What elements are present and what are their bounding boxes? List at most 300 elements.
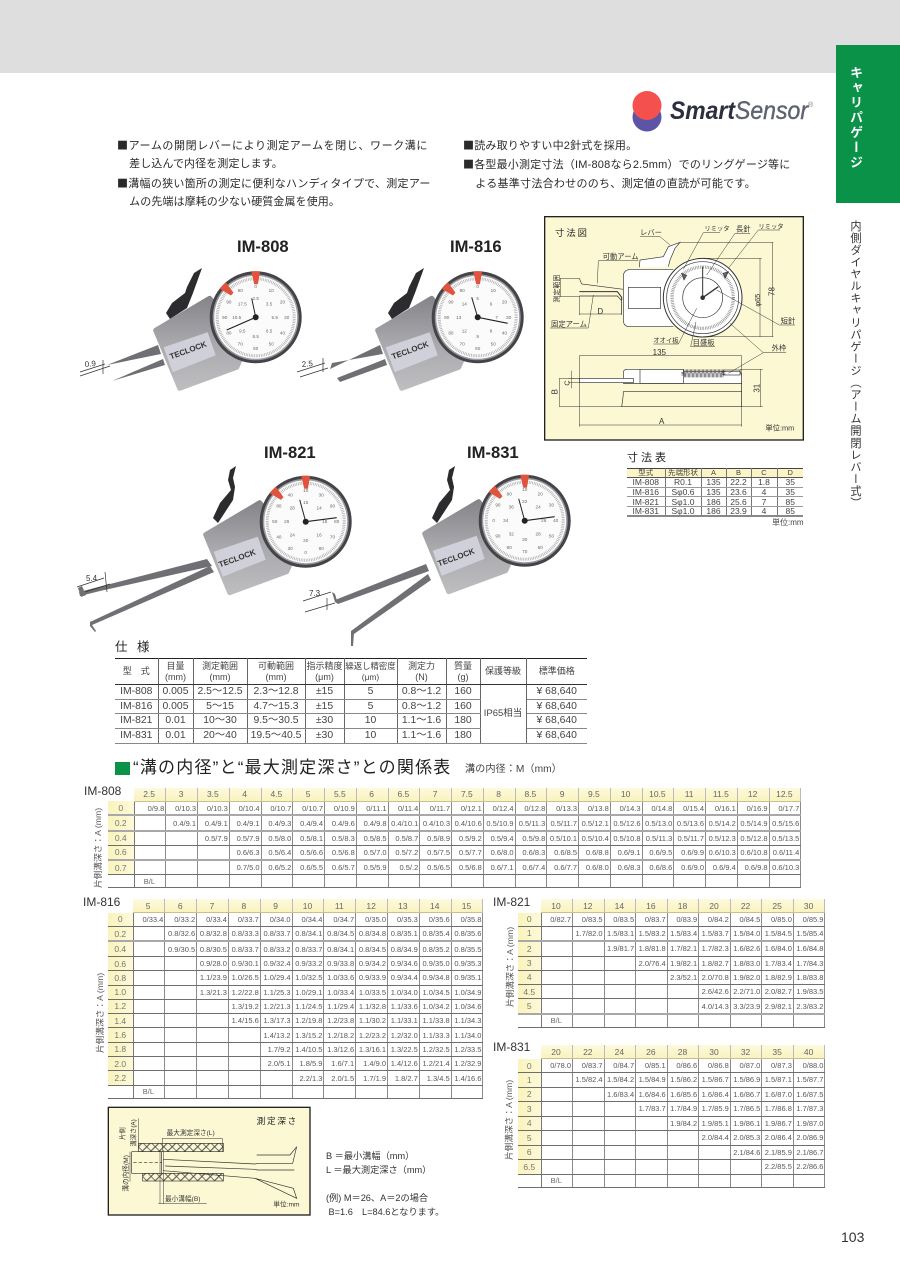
- drawing labels: 寸法図: [555, 227, 589, 238]
- table: IM-821: 2.0/70.8: [702, 973, 729, 982]
- table: IM-821: 0/84.5: [739, 915, 760, 924]
- table: IM-816: 1.7/9.2: [268, 1045, 291, 1054]
- dial: 60: [538, 545, 543, 550]
- table: IM-816: 1.3/4.5: [427, 1074, 450, 1083]
- depth notes: L ＝最大測定深さ（mm）: [326, 1165, 431, 1175]
- table: IM-816: 0.8/35.1: [391, 929, 418, 938]
- table: IM-808: 0.6/8.8: [586, 848, 609, 857]
- dial: 90: [495, 534, 501, 539]
- table: IM-816: 1.0/34.5: [423, 988, 450, 997]
- table: IM-821: 0/83.9: [676, 915, 697, 924]
- table: IM-821: 3.3/23.9: [733, 1002, 760, 1011]
- side view: [623, 369, 742, 383]
- table: IM-808: 0.5/11.3: [646, 834, 672, 843]
- features text left: ムの先端は摩耗の少ない硬質金属を使用。: [129, 196, 340, 208]
- dial: 20: [502, 299, 507, 304]
- specification table: 180: [454, 730, 472, 741]
- dial: 30: [284, 315, 290, 320]
- table: IM-816: 1.6: [114, 1030, 126, 1040]
- table: IM-808: 0.5/.2: [399, 863, 418, 872]
- heading text: “溝の内径”と“最大測定深さ”との関係表: [133, 758, 451, 777]
- specification table: (mm): [165, 672, 186, 682]
- table: IM-808: 0.4/10.3: [423, 819, 450, 828]
- logo: SmartSensor: Smart: [670, 97, 737, 125]
- table: IM-831: 1.9/86.7: [765, 1119, 792, 1128]
- table: IM-816: 0.9/35.3: [454, 959, 481, 968]
- table: IM-821: 1.5/84.5: [765, 929, 792, 938]
- table: IM-808: 7: [433, 789, 437, 799]
- table: IM-816: 5: [146, 901, 151, 911]
- table: IM-808: 0.6/9.8: [745, 863, 768, 872]
- table: IM-816: 0.9/30.5: [168, 945, 195, 954]
- dial: 9: [476, 334, 479, 339]
- table: IM-808: 0/15.4: [683, 804, 704, 813]
- table: IM-821: 0/82.7: [550, 915, 571, 924]
- specification table: 質量: [454, 660, 472, 670]
- table: IM-831: 0/87.3: [771, 1061, 792, 1070]
- table: IM-821: 1.7/82.3: [702, 944, 729, 953]
- table: IM-821: 18: [678, 901, 687, 911]
- drawing labels: リミッタ: [704, 224, 730, 233]
- table: IM-816: 1.8/5.9: [299, 1059, 322, 1068]
- features text left: 差し込んで内径を測定します。: [129, 158, 283, 170]
- table: IM-821: 12: [583, 901, 593, 911]
- specification table: 測定力: [408, 660, 435, 670]
- table: IM-816: 0.6: [114, 958, 126, 968]
- table: IM-808: 0.5/8.1: [300, 834, 323, 843]
- table: IM-821: 1.8/83.8: [796, 973, 823, 982]
- table: IM-831: 1.6/87.5: [796, 1090, 823, 1099]
- table: IM-816: 1.2/32.0: [391, 1031, 418, 1040]
- table: IM-821: 2.9/82.1: [765, 1002, 792, 1011]
- heading unit: 溝の内径：M（mm）: [465, 764, 562, 775]
- table: IM-808: 0.5/11.3: [519, 819, 545, 828]
- table: IM-821: 1.6/84.0: [765, 944, 792, 953]
- dial: 8: [490, 328, 493, 333]
- table: IM-821: 1.9/82.0: [733, 973, 760, 982]
- table: IM-831: 1.9/86.1: [733, 1119, 760, 1128]
- table: IM-831: 1.5/87.1: [765, 1075, 792, 1084]
- table: IM-808: 5: [306, 789, 310, 799]
- table: IM-816: [108, 899, 483, 1099]
- table: IM-831: 0: [527, 1061, 532, 1071]
- title: IM-808: IM-808: [237, 237, 289, 256]
- table: IM-808: 0.6/5.5: [300, 863, 323, 872]
- table: IM-808: 0/10.7: [302, 804, 323, 813]
- vertical label: IM-821: 片側溝深さ：A (mm): [505, 927, 515, 1007]
- table: IM-808: 0.6/9.9: [681, 848, 704, 857]
- dial: 5: [476, 296, 479, 301]
- drawing labels: 短針: [781, 316, 796, 325]
- table: IM-816: 1.0/26.5: [232, 973, 259, 982]
- table: IM-831: 0/86.8: [708, 1061, 729, 1070]
- table: IM-816: 1.4/12.6: [391, 1059, 418, 1068]
- specification table: IP65相当: [484, 708, 522, 719]
- table: IM-816: 0.9/30.1: [232, 959, 259, 968]
- table: IM-816: 1.3/17.3: [263, 1016, 291, 1025]
- table: IM-808: 0.5/10.8: [613, 834, 640, 843]
- dial: 50: [491, 342, 496, 347]
- table: IM-831: 2.2/86.6: [796, 1162, 823, 1171]
- arms: [332, 564, 431, 646]
- page number: 103: [841, 1229, 864, 1245]
- table: IM-816: 0/33.7: [238, 915, 259, 924]
- depth notes: [326, 1151, 444, 1217]
- table: IM-808: 0.4/9.8: [364, 819, 386, 828]
- table: IM-816: 1.3/22.5: [391, 1045, 418, 1054]
- table: IM-816: 1.2/32.9: [454, 1059, 481, 1068]
- drawing labels: レバー: [640, 228, 662, 237]
- dial: 0: [492, 518, 495, 523]
- table: IM-816: 1.0/34.2: [423, 1002, 450, 1011]
- table: IM-816: 0.9/34.4: [391, 973, 418, 982]
- dial: 26: [284, 519, 290, 524]
- dial: 90: [330, 504, 335, 509]
- dimension 0.9: 0.9: [84, 359, 97, 369]
- table: IM-821: 1.5/84.0: [733, 929, 760, 938]
- panel: measuring depth diagram: 溝深さ(A): [128, 1119, 137, 1147]
- table: IM-808: 0.5/12.1: [582, 819, 609, 828]
- table: IM-831: 2.0/86.4: [765, 1133, 792, 1142]
- table: IM-816: 1.0/33.5: [359, 988, 386, 997]
- specification table: 繰返し精密度: [345, 660, 396, 670]
- label: IM-831 table: IM-831: [493, 1040, 530, 1054]
- table: IM-808: 0.5/13.0: [645, 819, 672, 828]
- table: IM-816: 1.1/29.4: [327, 1002, 354, 1011]
- dial: 80: [319, 546, 324, 551]
- table: IM-808: 0.6/8.0: [586, 863, 609, 872]
- table: IM-831: 35: [772, 1047, 782, 1057]
- dial: 10: [522, 487, 528, 492]
- table: IM-816: 1.2/32.5: [423, 1045, 450, 1054]
- table: IM-808: 0/13.3: [556, 804, 577, 813]
- table: IM-808: 0.6/8.3: [522, 848, 545, 857]
- table: IM-816: 0.8/33.3: [232, 929, 259, 938]
- table: IM-821: 1.7/82.0: [575, 929, 603, 938]
- table: IM-808: 10.5: [649, 789, 666, 799]
- body: [378, 298, 468, 388]
- dial: 28: [536, 532, 541, 537]
- table: IM-808: 0/9.8: [148, 804, 164, 813]
- table: IM-821: 2.6/42.6: [702, 987, 729, 996]
- drawing labels: [550, 221, 796, 433]
- specification table: 0.005: [162, 686, 188, 697]
- specification table: 0.8～1.2: [402, 701, 441, 712]
- table: IM-816: 1.0/33.4: [327, 988, 354, 997]
- table: IM-808: 0.5/9.4: [491, 834, 514, 843]
- table: IM-831: 1.6/87.0: [765, 1090, 792, 1099]
- drawing labels: A: [659, 417, 665, 426]
- dimension 7.3: [303, 589, 335, 612]
- specification table: ±15: [316, 686, 333, 697]
- table: IM-816: 1.0/29.4: [263, 973, 291, 982]
- lever: [166, 268, 202, 319]
- table: IM-831: 2.0/85.3: [733, 1133, 760, 1142]
- table: IM-808: 0.5/14.2: [709, 819, 736, 828]
- table: IM-808: 0.5/9.8: [522, 834, 545, 843]
- table: IM-816: 0.8/34.9: [391, 945, 418, 954]
- table: IM-816: 2.0/1.5: [331, 1074, 354, 1083]
- table: IM-831: 2: [527, 1089, 532, 1099]
- specification table: (mm): [210, 672, 230, 682]
- dimension 5.4: [77, 572, 110, 592]
- table: IM-816: 1.3/12.6: [327, 1045, 354, 1054]
- table: IM-816: 0.9/34.8: [423, 973, 450, 982]
- dial: 3.5: [266, 301, 273, 306]
- specification table: 4.7～15.3: [253, 701, 299, 712]
- table: IM-821: [518, 899, 825, 1028]
- table: IM-808: 0/10.4: [239, 804, 260, 813]
- specification table: 5～15: [206, 701, 234, 712]
- table: IM-821: 1.5/83.7: [702, 929, 729, 938]
- table: IM-816: 0.9/33.9: [359, 973, 386, 982]
- specification table: ±30: [316, 715, 333, 726]
- lever: [388, 268, 424, 319]
- drawing labels: 135: [653, 348, 667, 357]
- table: IM-808: 0.7: [115, 863, 127, 873]
- table: IM-821: 30: [804, 901, 813, 911]
- table: IM-808: 0.5/7.0: [364, 848, 386, 857]
- table: IM-816: 0.8/32.8: [200, 929, 227, 938]
- table: IM-831: 0/87.0: [739, 1061, 760, 1070]
- table: IM-808: 0.6/10.3: [772, 863, 799, 872]
- table: IM-816: 1.2/22.8: [232, 988, 259, 997]
- table: IM-831: [518, 1045, 825, 1188]
- dial: 0: [476, 284, 479, 289]
- table: IM-808: B/L: [144, 877, 155, 886]
- table: IM-831: 1.5/87.7: [796, 1075, 823, 1084]
- table: IM-831: 2.1/86.7: [796, 1148, 823, 1157]
- table: IM-816: 2.2/1.3: [299, 1074, 322, 1083]
- table: IM-808: 0.6/9.1: [618, 848, 640, 857]
- dial: 14: [462, 301, 467, 306]
- table: IM-808: 0.5/6.8: [332, 848, 355, 857]
- dial: 30: [288, 546, 293, 551]
- table: IM-816: 1.0/34.6: [454, 1002, 481, 1011]
- specification table: 可動範囲: [258, 660, 294, 670]
- panel: measuring depth diagram: 単位:mm: [273, 1200, 300, 1209]
- table: IM-831: 6.5: [523, 1162, 535, 1172]
- table: IM-831: 40: [804, 1047, 813, 1057]
- table: IM-816: 1.2/33.5: [454, 1045, 481, 1054]
- table: IM-831: 1.9/84.2: [670, 1119, 697, 1128]
- dial: 60: [475, 346, 481, 351]
- table: IM-808: 0.4/10.6: [455, 819, 482, 828]
- specification table: 9.5～30.5: [253, 715, 299, 726]
- specification table: 19.5～40.5: [251, 730, 301, 741]
- dial: 90: [495, 503, 501, 508]
- table: IM-821: 0/85.9: [803, 915, 823, 924]
- table: IM-808: 8: [496, 789, 501, 799]
- table: IM-816: 2.2: [114, 1073, 126, 1083]
- table: IM-831: 20: [551, 1047, 561, 1057]
- dial: 90: [226, 299, 232, 304]
- table: IM-808: 0.5/13.5: [772, 834, 799, 843]
- table: IM-816: 0.4: [114, 944, 126, 954]
- dial: 26: [541, 518, 547, 523]
- table: IM-831: 1.7/85.9: [702, 1104, 729, 1113]
- dial: 30: [319, 492, 324, 497]
- table: IM-808: 0.5/9.2: [459, 834, 482, 843]
- table: IM-808: 0/10.9: [334, 804, 355, 813]
- table: IM-808: 0.6/8.5: [554, 848, 577, 857]
- dial: 40: [288, 492, 293, 497]
- table: IM-816: 1.4/15.6: [232, 1016, 259, 1025]
- dial: 70: [330, 535, 335, 540]
- table: IM-808: 0.6/8.3: [618, 863, 640, 872]
- table: IM-816: 1.4/13.2: [263, 1031, 291, 1040]
- table: IM-808: 0/17.7: [778, 804, 799, 813]
- table: IM-821: 1.8/81.8: [639, 944, 666, 953]
- features text right: ■各型最小測定寸法（IM-808なら2.5mm）でのリングゲージ等に: [463, 156, 790, 172]
- specification table: (mm): [266, 672, 286, 682]
- dial: 24: [290, 533, 295, 538]
- table: IM-808: 0.5/13.6: [677, 819, 704, 828]
- panel: measuring depth diagram: [108, 1106, 311, 1216]
- table: IM-816: 1.3/15.2: [295, 1031, 322, 1040]
- table: IM-816: 1.2/21.4: [423, 1059, 450, 1068]
- dial: 24: [536, 505, 541, 510]
- table: IM-821: 1.9/82.1: [670, 959, 697, 968]
- table: IM-816: 1.1/33.8: [423, 1016, 450, 1025]
- table: IM-831: 2.1/85.9: [765, 1148, 792, 1157]
- table: IM-808: 3: [179, 789, 183, 799]
- table: IM-816: 0.8/34.1: [295, 929, 322, 938]
- table: IM-816: 1.1/33.3: [423, 1031, 450, 1040]
- vertical label: IM-816: 片側溝深さ：A (mm): [95, 973, 105, 1053]
- table: IM-816: 0: [118, 914, 123, 924]
- table: IM-816: 1.4/9.0: [363, 1059, 386, 1068]
- table: IM-816: 0.9/35.0: [423, 959, 450, 968]
- specification table: ¥ 68,640: [537, 701, 577, 712]
- depth notes: B ＝最小溝幅（mm）: [326, 1151, 414, 1161]
- gauge: IM-821: [77, 466, 352, 632]
- table: IM-816: 2.0/5.1: [268, 1059, 291, 1068]
- table: IM-808: 0.4: [115, 833, 127, 843]
- drawing labels: B: [550, 389, 559, 394]
- table: IM-808: 0.5/8.5: [364, 834, 386, 843]
- table: IM-808: 0.4/9.3: [268, 819, 291, 828]
- dial: 8.5: [253, 334, 259, 339]
- table: IM-821: 0/83.5: [613, 915, 634, 924]
- features text right: ■読み取りやすい中2針式を採用。: [463, 137, 637, 153]
- dial: 6: [490, 301, 493, 306]
- table: IM-831: 0/86.6: [676, 1061, 697, 1070]
- table: IM-808: 0.5/6.6: [300, 848, 323, 857]
- table: IM-816: 0.2: [114, 929, 126, 939]
- table: IM-816: 1.1/24.5: [295, 1002, 322, 1011]
- table: IM-808: 0.4/9.1: [173, 819, 196, 828]
- dial: 90: [238, 288, 243, 293]
- specification table: 型 式: [123, 666, 150, 676]
- table: IM-808: 0.6/10.8: [740, 848, 768, 857]
- table: IM-808: 0/10.3: [175, 804, 196, 813]
- leader lines: [550, 230, 795, 427]
- table: IM-831: 28: [678, 1047, 687, 1057]
- brand: TECLOCK: [217, 548, 257, 569]
- dial: 20: [538, 491, 543, 496]
- table: IM-808: 0.6/9.0: [681, 863, 704, 872]
- gauge outline, front: [639, 242, 680, 267]
- table: IM-816: 15: [462, 901, 471, 911]
- table: IM-816: 0.8/34.5: [327, 929, 354, 938]
- table: IM-808: 0.5/6.5: [427, 863, 450, 872]
- dial: 32: [509, 532, 514, 537]
- specification table: ±15: [316, 701, 333, 712]
- heading: specifications: 仕 様: [115, 640, 152, 654]
- table: IM-808: 5.5: [334, 789, 346, 799]
- specification table: IM-821: [120, 715, 152, 726]
- table: IM-816: 0/34.0: [270, 915, 291, 924]
- tab title: キャリパゲージ: [848, 66, 863, 170]
- dial: 18: [322, 519, 328, 524]
- table: IM-808: 0.5/8.9: [427, 834, 450, 843]
- table: IM-808: 0.5/12.3: [709, 834, 736, 843]
- table: IM-831: 5: [527, 1133, 532, 1143]
- table: IM-808: 0.6/8.0: [491, 848, 514, 857]
- table: IM-808: 0.5/7.7: [459, 848, 482, 857]
- table: IM-808: 0.6/5.7: [332, 863, 355, 872]
- gauge: IM-831: [303, 466, 571, 646]
- table: IM-808: 0.6/10.3: [709, 848, 736, 857]
- table: IM-816: 7: [210, 901, 214, 911]
- panel: measuring depth diagram: 片側: [118, 1127, 127, 1140]
- table: IM-808: 12: [748, 789, 757, 799]
- table: IM-831: 1.9/85.1: [702, 1119, 729, 1128]
- dial: 80: [276, 504, 282, 509]
- specification table: 0.01: [165, 730, 186, 741]
- table: IM-816: 1.1/32.8: [359, 1002, 386, 1011]
- table: IM-808: 0.5/12.8: [740, 834, 768, 843]
- specification table: 標準価格: [539, 666, 575, 676]
- table: IM-816: 0.8/33.2: [263, 945, 291, 954]
- drawing labels: 測定範囲: [552, 275, 561, 303]
- table: IM-808: 0.6/5.2: [268, 863, 291, 872]
- table: IM-808: 0/11.7: [430, 804, 450, 813]
- table: IM-816: 0/33.4: [142, 915, 163, 924]
- lever: [213, 466, 236, 523]
- specification table: IM-808: [120, 686, 152, 697]
- table: IM-831: 1.5/84.2: [607, 1075, 634, 1084]
- dial: 20: [303, 538, 309, 543]
- arms: [107, 345, 165, 381]
- table: IM-808: 0/14.3: [620, 804, 640, 813]
- table: IM-831: 1: [527, 1075, 532, 1085]
- table: IM-816: 0.8/33.7: [263, 929, 291, 938]
- table: IM-816: 0/35.0: [365, 915, 386, 924]
- features text right: よる基準寸法合わせののち、測定値の直読が可能です。: [475, 178, 756, 190]
- table: IM-821: 14: [615, 901, 624, 911]
- table: IM-831: 0/88.0: [803, 1061, 823, 1070]
- dial: 7: [495, 315, 498, 320]
- table: IM-816: 1.8/2.7: [395, 1074, 418, 1083]
- table: IM-808: 0.5/11.7: [550, 819, 577, 828]
- table: IM-808: 0.4/9.1: [237, 819, 260, 828]
- table: IM-816: 0.8/33.7: [295, 945, 322, 954]
- dial: 70: [522, 549, 528, 554]
- table: IM-808: 0/13.8: [588, 804, 609, 813]
- panel: measuring depth diagram: 最大測定深さ(L): [167, 1128, 215, 1137]
- drawing labels: 31: [753, 383, 762, 393]
- table: IM-816: 1.2: [114, 1001, 126, 1011]
- table: IM-816: 13: [398, 901, 408, 911]
- table: IM-808: 12.5: [776, 789, 793, 799]
- table: IM-821: 2.3/83.2: [796, 1002, 823, 1011]
- table: IM-831: 0/85.1: [645, 1061, 666, 1070]
- dial: [479, 475, 571, 567]
- table: IM-808: 0.5/8.7: [395, 834, 418, 843]
- table: IM-808: 0.5/15.6: [772, 819, 799, 828]
